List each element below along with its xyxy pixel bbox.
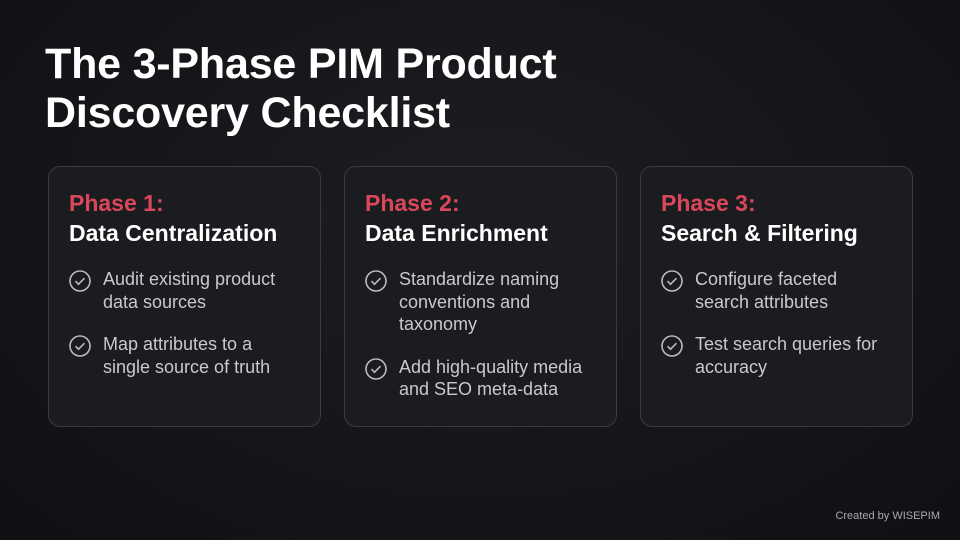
heading: phase 1: Data Centralization xyxy=(69,220,277,246)
heading: phase 3: Phase 3: xyxy=(661,190,756,216)
item: faceted: Configure faceted search attributes xyxy=(695,269,837,312)
item: standardize: Standardize naming conventions and taxonomy xyxy=(399,269,559,334)
title: The 3-Phase PIM Product xyxy=(45,40,557,88)
panel: phase 1 xyxy=(48,166,321,427)
title: Discovery Checklist xyxy=(45,89,450,137)
item: map: Map attributes to a single source of truth xyxy=(103,334,270,376)
panel: phase 3 xyxy=(640,166,913,427)
footer credit: Created by WISEPIM xyxy=(835,510,940,522)
item: audit: Audit existing product data sources xyxy=(103,269,275,312)
heading: phase 3: Search & Filtering xyxy=(661,220,858,246)
title xyxy=(45,40,557,137)
heading: phase 2: Phase 2: xyxy=(365,190,460,216)
item: test: Test search queries for accuracy xyxy=(695,334,877,376)
heading: phase 1 xyxy=(69,190,277,246)
heading: phase 2 xyxy=(365,190,548,246)
item: media: Add high-quality media and SEO meta-data xyxy=(399,356,582,399)
heading: phase 2: Data Enrichment xyxy=(365,220,548,246)
panel: phase 2 xyxy=(344,166,617,427)
heading: phase 1: Phase 1: xyxy=(69,190,164,216)
heading: phase 3 xyxy=(661,190,858,246)
